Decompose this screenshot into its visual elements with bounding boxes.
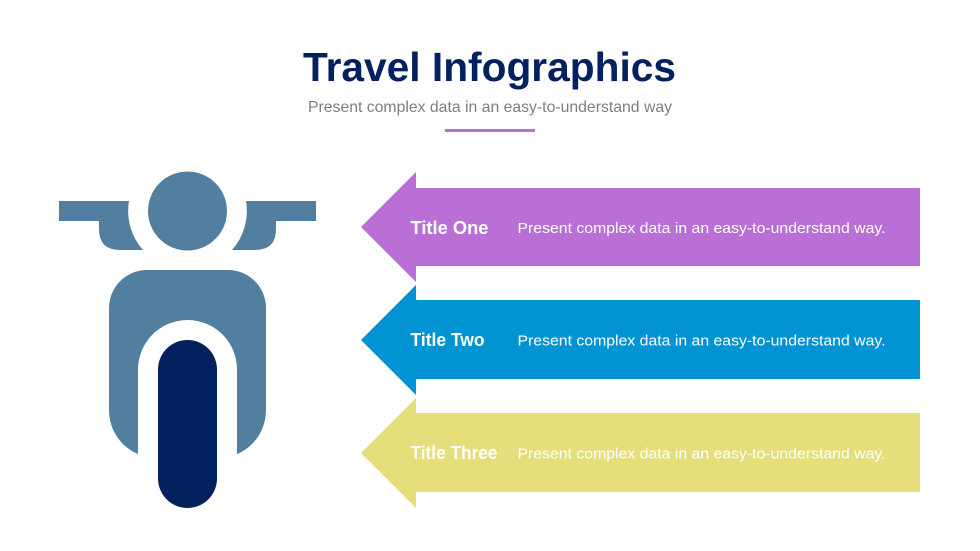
arrow shape bbox=[361, 285, 920, 395]
front wheel bbox=[158, 340, 217, 508]
title: Travel Infographics bbox=[303, 44, 676, 90]
arrow heading: Title Three bbox=[410, 442, 498, 463]
subtitle: Present complex data in an easy-to-understand way bbox=[308, 99, 672, 116]
arrow description: Present complex data in an easy-to-understand way. bbox=[518, 332, 886, 350]
motorbike body bbox=[109, 270, 266, 454]
panel: arrow one bbox=[361, 172, 920, 282]
arrow shape bbox=[361, 398, 920, 508]
arrow heading: Title Two bbox=[410, 329, 484, 350]
rider head bbox=[148, 172, 227, 250]
arrow description: Present complex data in an easy-to-understand way. bbox=[518, 220, 886, 237]
icon: motorbike rider bbox=[59, 172, 316, 508]
left handlebar bbox=[59, 201, 143, 250]
title underline bbox=[445, 129, 535, 132]
panel: arrow two bbox=[361, 285, 920, 395]
right handlebar bbox=[232, 201, 316, 250]
arrow heading: Title One bbox=[410, 217, 488, 238]
arrow shape bbox=[361, 172, 920, 282]
arrow description: Present complex data in an easy-to-understand way. bbox=[518, 446, 886, 462]
panel: arrow three bbox=[361, 398, 920, 508]
